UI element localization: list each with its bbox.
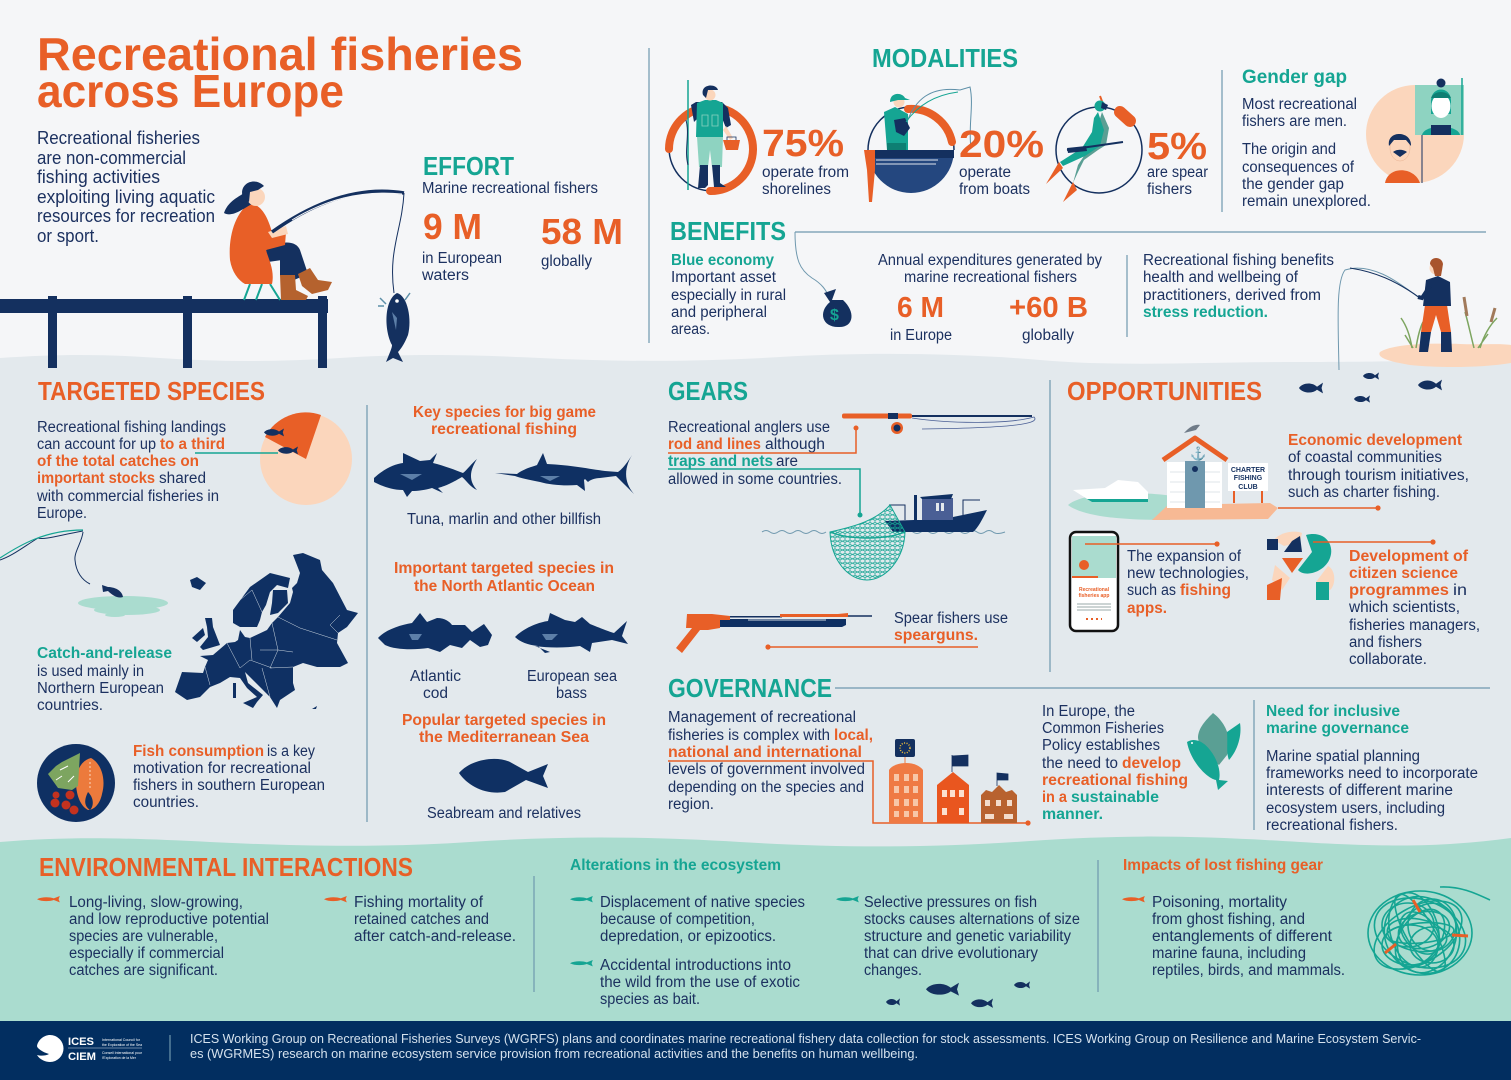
panel: North Atlantic species: bass bbox=[556, 685, 587, 702]
text: catch and release: countries. bbox=[37, 697, 103, 714]
text: catch and release bbox=[37, 645, 172, 714]
text: inclusive governance: recreational fishers. bbox=[1266, 817, 1398, 834]
icon: school of fish near shore bbox=[1299, 372, 1442, 403]
panel: annual expenditures: marine recreational fishers bbox=[904, 269, 1077, 286]
intro text: Recreational fisheries bbox=[37, 128, 200, 148]
icon: boat with net bbox=[668, 469, 1005, 580]
bullet text: fishing mortality: after catch-and-release. bbox=[354, 928, 516, 945]
text: common fisheries policy: In Europe, the bbox=[1042, 703, 1135, 720]
panel: annual expenditures bbox=[878, 252, 1102, 344]
icon: shoreline angler 75% ring bbox=[669, 80, 755, 191]
text: catch and release: is used mainly in bbox=[37, 663, 144, 680]
illustration: charter fishing club bbox=[1068, 425, 1381, 520]
text: a third of catches: Recreational fishing landings bbox=[37, 419, 226, 436]
icon: fishing app phone bbox=[1070, 532, 1220, 631]
text: new technologies: new technologies, bbox=[1127, 565, 1249, 582]
map: Europe bbox=[175, 553, 358, 709]
illustration: charter fishing club: FISHING bbox=[1234, 475, 1263, 482]
intro text: resources for recreation bbox=[37, 206, 215, 226]
panel: annual expenditures: in Europe bbox=[890, 327, 952, 344]
stat: 75% bbox=[762, 123, 849, 198]
text: fish consumption: countries. bbox=[133, 794, 199, 811]
icon: boat angler 20% ring bbox=[864, 87, 971, 202]
logo: ICES CIEM: l'Exploration de la Mer bbox=[102, 1055, 137, 1060]
text: citizen science: collaborate. bbox=[1349, 651, 1427, 668]
title bbox=[37, 28, 523, 117]
stat: 20%: 20% bbox=[959, 124, 1044, 166]
bullet text: displacement bbox=[570, 894, 805, 945]
panel: blue economy: areas. bbox=[671, 321, 710, 338]
panel: gender gap text: consequences of bbox=[1242, 159, 1355, 176]
panel: effort: Marine recreational fishers bbox=[422, 180, 598, 197]
chart: one third pie bbox=[195, 412, 352, 505]
text: citizen science: citizen science bbox=[1349, 565, 1458, 582]
panel: North Atlantic species: Important targeted species in bbox=[394, 560, 614, 577]
stat: 5%: fishers bbox=[1147, 181, 1192, 198]
intro text: or sport. bbox=[37, 226, 99, 246]
bullet text: ghost fishing: entanglements of different bbox=[1152, 928, 1333, 945]
text: citizen science: in bbox=[1453, 582, 1467, 599]
bullet text: vulnerable species: catches are significant. bbox=[69, 962, 218, 979]
text: common fisheries policy: manner. bbox=[1042, 806, 1103, 823]
text: inclusive governance: Marine spatial planning bbox=[1266, 748, 1420, 765]
text: fish consumption: fishers in southern European bbox=[133, 777, 325, 794]
bullet text: fishing mortality: Fishing mortality of bbox=[354, 894, 484, 911]
panel: stress reduction: health and wellbeing of bbox=[1143, 269, 1299, 286]
icon: money bag on a line: $ bbox=[830, 307, 839, 324]
panel: gender gap text: Gender gap bbox=[1242, 67, 1347, 88]
panel: big game species: Tuna, marlin and other billfish bbox=[407, 511, 601, 528]
panel: North Atlantic species: cod bbox=[423, 685, 448, 702]
bullet text: ghost fishing: reptiles, birds, and mammals. bbox=[1152, 962, 1345, 979]
heading: gears: GEARS bbox=[668, 376, 748, 406]
heading: targeted species: TARGETED SPECIES bbox=[38, 376, 265, 406]
panel: effort: EFFORT bbox=[423, 151, 514, 181]
text: new technologies: such as bbox=[1127, 582, 1176, 599]
icon: speargun bbox=[676, 613, 978, 653]
panel: gender gap text: Most recreational bbox=[1242, 96, 1357, 113]
heading: opportunities: OPPORTUNITIES bbox=[1067, 376, 1262, 406]
panel: effort: 9 M bbox=[423, 206, 482, 247]
illustration: man fishing from shore bbox=[1338, 258, 1511, 370]
panel: annual expenditures: globally bbox=[1022, 327, 1074, 344]
text: new technologies: The expansion of bbox=[1127, 548, 1242, 565]
panel: blue economy: Important asset bbox=[671, 269, 777, 286]
panel: effort: waters bbox=[421, 267, 469, 284]
heading: governance: GOVERNANCE bbox=[668, 673, 832, 703]
text: inclusive governance: marine governance bbox=[1266, 720, 1409, 737]
panel: North Atlantic species bbox=[378, 560, 628, 702]
intro text: are non-commercial bbox=[37, 148, 186, 168]
text: governance complexity bbox=[668, 709, 873, 813]
bullet text: accidental introductions bbox=[570, 957, 800, 1008]
text: inclusive governance: interests of different marine bbox=[1266, 782, 1453, 799]
logo: ICES CIEM: ICES bbox=[68, 1036, 94, 1048]
text: a third of catches: of the total catches on bbox=[37, 453, 199, 470]
panel: stress reduction: stress reduction. bbox=[1143, 304, 1268, 321]
panel: effort: in European bbox=[422, 250, 502, 267]
icon: fishing rod bbox=[668, 413, 1035, 453]
icon: citizen science hands and pie bbox=[1267, 532, 1436, 600]
text: new technologies: apps. bbox=[1127, 600, 1167, 617]
text: a third of catches bbox=[36, 419, 226, 522]
text: citizen science: which scientists, bbox=[1348, 599, 1460, 616]
title: Recreational fisheries bbox=[37, 28, 523, 80]
text: a third of catches: shared bbox=[159, 470, 206, 487]
panel: gender gap text: the gender gap bbox=[1242, 176, 1344, 193]
text: a third of catches: Europe. bbox=[37, 505, 87, 522]
text: governance complexity: local, bbox=[834, 727, 873, 744]
text: common fisheries policy: sustainable bbox=[1071, 789, 1159, 806]
text: inclusive governance: ecosystem users, including bbox=[1266, 800, 1445, 817]
footer text: ICES Working Group on Recreational Fisheries Surveys (WGRFS) plans and coordinates marine recreational fishery data collection for stock assessments. ICES Working Group on Resilience and Marine Ecosystem Servic- bbox=[190, 1032, 1421, 1046]
bullet text: ghost fishing: Poisoning, mortality bbox=[1152, 894, 1287, 911]
heading: environmental interactions: ENVIRONMENTAL INTERACTIONS bbox=[39, 852, 413, 882]
logo: ICES CIEM: CIEM bbox=[68, 1051, 96, 1063]
bullet text: selective pressures bbox=[836, 894, 1080, 979]
text: rods and traps: rod and lines bbox=[668, 436, 761, 453]
text: inclusive governance: Need for inclusive bbox=[1266, 703, 1400, 720]
stat: 5%: are spear bbox=[1147, 164, 1208, 181]
panel: North Atlantic species: Atlantic bbox=[410, 668, 461, 685]
text: citizen science: fisheries managers, bbox=[1349, 617, 1480, 634]
pier bbox=[0, 296, 328, 368]
text: rods and traps: are bbox=[776, 453, 798, 470]
illustration: charter fishing club: CLUB bbox=[1238, 484, 1258, 491]
text: catch and release: Catch-and-release bbox=[37, 645, 172, 662]
panel: big game species bbox=[374, 404, 634, 528]
text: citizen science: and fishers bbox=[1349, 634, 1422, 651]
panel: gender gap text: remain unexplored. bbox=[1242, 193, 1371, 210]
title: across Europe bbox=[37, 65, 344, 117]
illustration: charter fishing club: CHARTER bbox=[1231, 467, 1265, 474]
bullet text: accidental introductions: Accidental introductions into bbox=[600, 957, 791, 974]
text: a third of catches: with commercial fisheries in bbox=[36, 488, 219, 505]
stat: 75%: shorelines bbox=[762, 181, 831, 198]
footer text bbox=[190, 1032, 1421, 1061]
lower grey sea section bbox=[0, 354, 1511, 1080]
icon: small fish group bbox=[886, 981, 1030, 1008]
icon: money bag on a line bbox=[795, 232, 852, 327]
text: spear fishers: spearguns. bbox=[894, 627, 978, 644]
panel: annual expenditures: 6 M bbox=[897, 292, 944, 324]
bullet text: ghost fishing: marine fauna, including bbox=[1152, 945, 1306, 962]
panel: Mediterranean species: Popular targeted species in bbox=[402, 712, 606, 729]
bullet text: ghost fishing bbox=[1122, 894, 1345, 979]
text: citizen science: Development of bbox=[1349, 548, 1469, 565]
icon: fishing app phone: Recreational bbox=[1079, 587, 1110, 593]
text: governance complexity: depending on the species and bbox=[668, 779, 864, 796]
icon: fish consumption plate bbox=[37, 744, 115, 822]
text: fish consumption: motivation for recreational bbox=[133, 760, 311, 777]
stat: 20%: operate bbox=[959, 164, 1011, 181]
text: spear fishers: Spear fishers use bbox=[894, 610, 1008, 627]
panel: gender gap text bbox=[1242, 67, 1371, 210]
text: new technologies: fishing bbox=[1180, 582, 1231, 599]
bullet text: vulnerable species: species are vulnerable, bbox=[69, 928, 218, 945]
stat: 75%: 75% bbox=[762, 123, 844, 165]
intro text: exploiting living aquatic bbox=[37, 187, 215, 207]
bullet text: vulnerable species: especially if commercial bbox=[69, 945, 224, 962]
icon: government buildings bbox=[668, 739, 1031, 826]
heading: modalities: MODALITIES bbox=[872, 43, 1018, 73]
text: common fisheries policy: the need to bbox=[1042, 755, 1118, 772]
panel: annual expenditures: Annual expenditures generated by bbox=[878, 252, 1102, 269]
text: inclusive governance bbox=[1266, 703, 1478, 834]
bullet text: fishing mortality bbox=[324, 894, 516, 945]
stat: 5%: 5% bbox=[1147, 126, 1207, 168]
illustration: woman fishing bbox=[224, 182, 404, 300]
text: common fisheries policy: Policy establishes bbox=[1042, 737, 1160, 754]
subheading: impacts of lost fishing gear: Impacts of lost fishing gear bbox=[1123, 857, 1323, 874]
footer text: es (WGRMES) research on marine ecosystem service provision from recreational activities and the benefits on human wellbeing. bbox=[190, 1047, 918, 1061]
stat: 20%: from boats bbox=[959, 181, 1030, 198]
text: governance complexity: Management of recreational bbox=[668, 709, 856, 726]
text: a third of catches: to a third bbox=[160, 436, 225, 453]
bullet text: fishing mortality: retained catches and bbox=[354, 911, 489, 928]
panel: effort: globally bbox=[541, 253, 592, 270]
text: rods and traps: allowed in some countries. bbox=[668, 471, 842, 488]
text: rods and traps: traps and nets bbox=[668, 453, 773, 470]
text: common fisheries policy: recreational fishing bbox=[1042, 772, 1188, 789]
illustration: hanging fish bbox=[378, 293, 410, 362]
text: rods and traps: although bbox=[765, 436, 825, 453]
icon: spear fisher 5% ring bbox=[1046, 96, 1142, 202]
text: fish consumption: Fish consumption bbox=[133, 743, 264, 760]
panel: North Atlantic species: European sea bbox=[527, 668, 617, 685]
panel: Mediterranean species: Seabream and relatives bbox=[427, 805, 581, 822]
text: economic development: through tourism initiatives, bbox=[1288, 467, 1469, 484]
logo: ICES CIEM: International Council for bbox=[102, 1037, 141, 1042]
bullet text: displacement: Displacement of native species bbox=[600, 894, 805, 911]
text: governance complexity: region. bbox=[668, 796, 714, 813]
bullet text: vulnerable species bbox=[37, 894, 269, 979]
panel: blue economy: and peripheral bbox=[671, 304, 767, 321]
panel: blue economy: especially in rural bbox=[671, 287, 786, 304]
stat: 20% bbox=[959, 124, 1044, 198]
panel: effort: 58 M bbox=[541, 211, 623, 252]
bullet text: selective pressures: structure and genetic variability bbox=[864, 928, 1071, 945]
bullet text: accidental introductions: species as bait. bbox=[600, 991, 700, 1008]
footer band bbox=[0, 1021, 1511, 1080]
text: common fisheries policy: in a bbox=[1042, 789, 1067, 806]
bullet text: displacement: depredation, or epizootics. bbox=[600, 928, 776, 945]
text: economic development bbox=[1288, 432, 1469, 501]
teal sea section bbox=[0, 837, 1511, 1080]
text: rods and traps bbox=[668, 419, 842, 488]
panel: annual expenditures: +60 B bbox=[1009, 292, 1088, 324]
bullet text: displacement: because of competition, bbox=[600, 911, 755, 928]
panel: gender gap text: fishers are men. bbox=[1242, 113, 1347, 130]
logo: ICES CIEM bbox=[37, 1035, 143, 1063]
text: citizen science: programmes bbox=[1349, 582, 1449, 599]
heading: benefits: BENEFITS bbox=[670, 216, 786, 246]
text: fish consumption bbox=[133, 743, 325, 811]
stat: 5% bbox=[1147, 126, 1208, 198]
text: citizen science bbox=[1348, 548, 1480, 668]
icon: tangled ghost net bbox=[1362, 881, 1490, 989]
bullet text: selective pressures: that can drive evolutionary bbox=[864, 945, 1038, 962]
panel: blue economy bbox=[671, 252, 786, 338]
subheading: alterations in the ecosystem: Alterations in the ecosystem bbox=[570, 857, 781, 874]
bullet text: selective pressures: stocks causes alternations of size bbox=[864, 911, 1080, 928]
illustration: catch and release bbox=[0, 530, 168, 617]
text: economic development: such as charter fishing. bbox=[1288, 484, 1440, 501]
illustration: charter fishing club: ⚓ bbox=[1190, 446, 1206, 461]
panel: stress reduction bbox=[1143, 252, 1334, 321]
text: governance complexity: levels of government involved bbox=[668, 761, 865, 778]
text: rods and traps: Recreational anglers use bbox=[668, 419, 830, 436]
panel: gender gap text: The origin and bbox=[1242, 141, 1336, 158]
logo: ICES CIEM: Conseil International pour bbox=[102, 1050, 143, 1055]
bullet text: accidental introductions: the wild from the use of exotic bbox=[600, 974, 800, 991]
panel: stress reduction: practitioners, derived from bbox=[1143, 287, 1321, 304]
logo: ICES CIEM: the Exploration of the Sea bbox=[102, 1042, 143, 1047]
panel: stress reduction: Recreational fishing benefits bbox=[1143, 252, 1334, 269]
panel: blue economy: Blue economy bbox=[671, 252, 774, 269]
text: economic development: Economic development bbox=[1288, 432, 1462, 449]
bullet text: ghost fishing: from ghost fishing, and bbox=[1152, 911, 1305, 928]
intro text: fishing activities bbox=[37, 167, 160, 187]
icon: gender gap portraits bbox=[1366, 78, 1464, 183]
bullet text: vulnerable species: Long-living, slow-growing, bbox=[69, 894, 243, 911]
text: a third of catches: important stocks bbox=[37, 470, 155, 487]
icon: leaf fish bbox=[1187, 713, 1241, 790]
text: inclusive governance: frameworks need to incorporate bbox=[1266, 765, 1478, 782]
stat: 75%: operate from bbox=[762, 164, 849, 181]
text: economic development: of coastal communities bbox=[1288, 449, 1442, 466]
text: common fisheries policy bbox=[1042, 703, 1188, 823]
panel: big game species: recreational fishing bbox=[431, 421, 577, 438]
panel: Mediterranean species: the Mediterranean Sea bbox=[419, 729, 589, 746]
bullet text: selective pressures: Selective pressures on fish bbox=[864, 894, 1037, 911]
panel: effort bbox=[421, 151, 623, 284]
text: catch and release: Northern European bbox=[37, 680, 164, 697]
text: governance complexity: fisheries is complex with bbox=[668, 727, 830, 744]
icon: fishing app phone: fisheries app bbox=[1079, 593, 1109, 599]
text: new technologies bbox=[1127, 548, 1249, 617]
panel: North Atlantic species: the North Atlantic Ocean bbox=[414, 578, 595, 595]
bullet text: vulnerable species: and low reproductive potential bbox=[69, 911, 269, 928]
text: spear fishers bbox=[894, 610, 1008, 644]
text: governance complexity: national and international bbox=[668, 744, 862, 761]
text: a third of catches: can account for up bbox=[37, 436, 156, 453]
text: common fisheries policy: develop bbox=[1122, 755, 1181, 772]
intro text bbox=[37, 128, 215, 246]
text: common fisheries policy: Common Fisheries bbox=[1042, 720, 1164, 737]
panel: Mediterranean species bbox=[402, 712, 606, 822]
panel: big game species: Key species for big game bbox=[413, 404, 596, 421]
bullet text: selective pressures: changes. bbox=[864, 962, 922, 979]
text: fish consumption: is a key bbox=[267, 743, 315, 760]
